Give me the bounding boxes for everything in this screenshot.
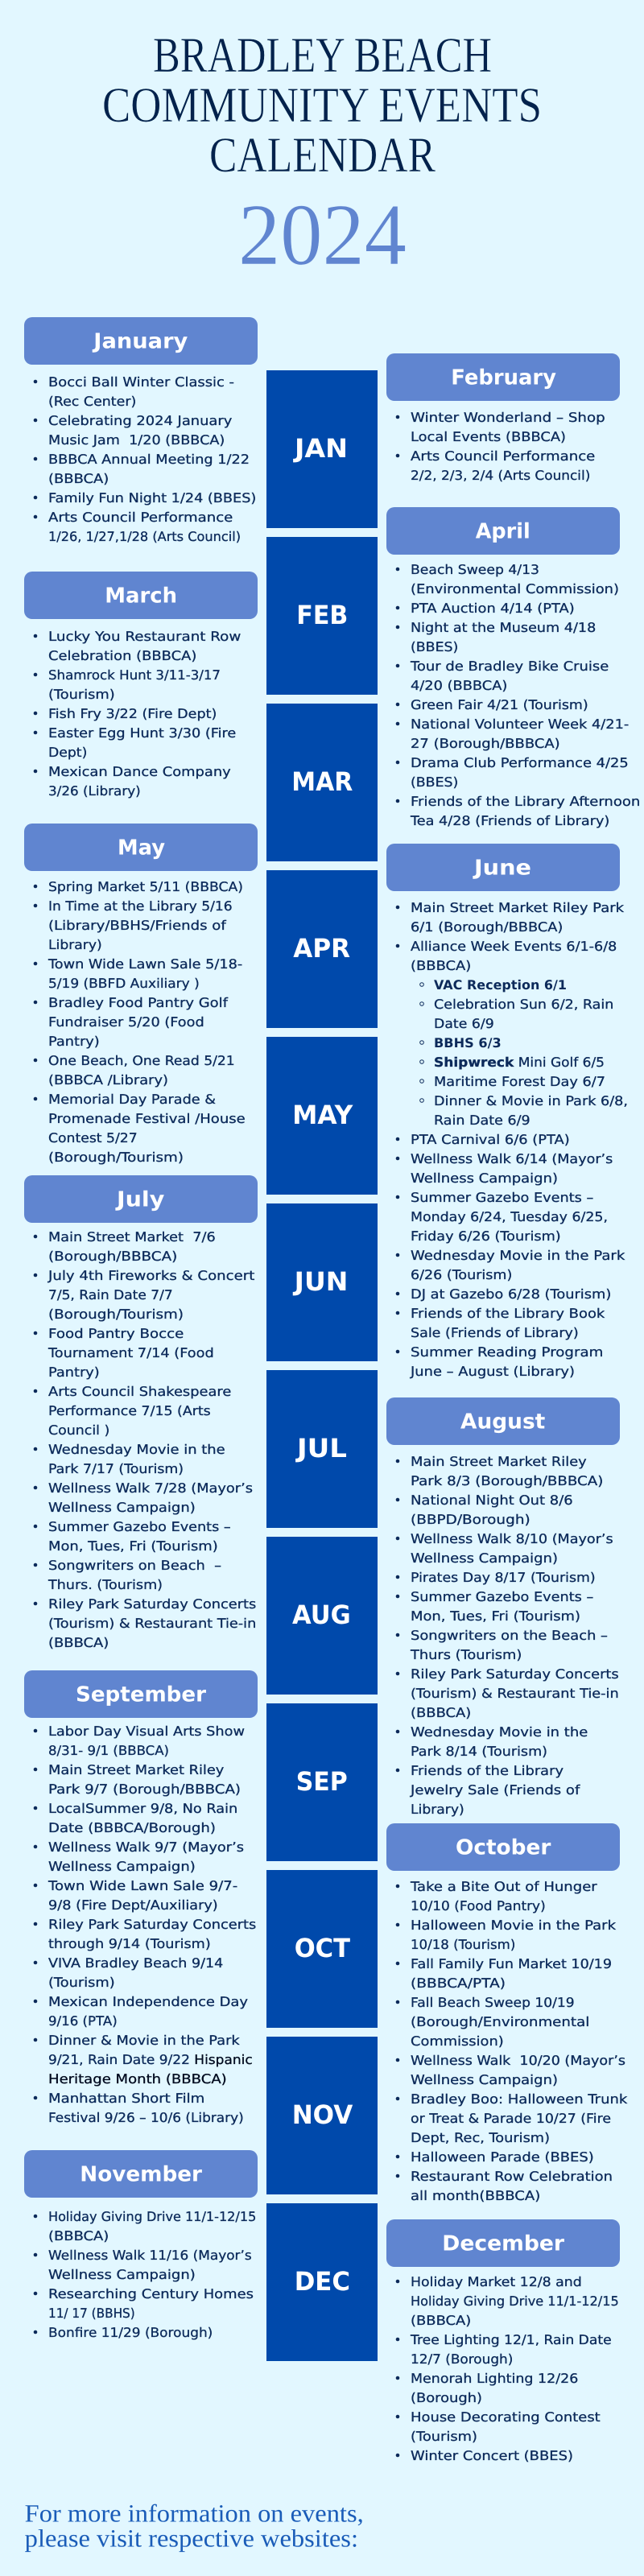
event list: September: 9/8 (Fire Dept/Auxiliary): [48, 1897, 218, 1913]
event list: July: Arts Council Shakespeare: [48, 1384, 231, 1399]
event list: April: Tea 4/28 (Friends of Library): [410, 813, 609, 828]
event list: July: [34, 1229, 256, 1650]
event list: September: 8/31- 9/1 (BBBCA): [48, 1743, 169, 1758]
event list: April: [396, 562, 640, 828]
event list: November: Wellness Campaign): [48, 2267, 196, 2282]
event list: October: (Borough/Environmental: [411, 2014, 589, 2029]
event list: June: Rain Date 6/9: [434, 1113, 530, 1128]
event list: October: Fall Beach Sweep 10/19: [411, 1995, 575, 2010]
event list: July: Pantry): [48, 1364, 100, 1380]
bar: MAR: MAR: [291, 766, 353, 797]
event list: May: Fundraiser 5/20 (Food: [48, 1014, 204, 1030]
event list: June: Alliance Week Events 6/1-6/8: [411, 939, 617, 954]
event list: April: Tour de Bradley Bike Cruise: [410, 658, 609, 674]
event list: July: Wellness Walk 7/28 (Mayor’s: [48, 1480, 253, 1496]
event list: July: July 4th Fireworks & Concert: [47, 1268, 254, 1283]
event list: August: Park 8/14 (Tourism): [411, 1744, 547, 1759]
event list: April: (Environmental Commission): [411, 581, 619, 597]
event list: April: 27 (Borough/BBBCA): [411, 736, 560, 751]
heading: September: [24, 1670, 258, 1718]
event list: September: Festival 9/26 – 10/6 (Library): [48, 2110, 244, 2125]
event list: June: Main Street Market Riley Park: [411, 900, 625, 915]
event list: August: Main Street Market Riley: [411, 1454, 587, 1469]
event list: August: Friends of the Library: [411, 1763, 564, 1778]
heading: December: December: [442, 2231, 564, 2256]
heading: October: October: [456, 1835, 551, 1860]
title: BRADLEY BEACH: [153, 28, 492, 83]
event list: December: Holiday Giving Drive 11/1-12/15: [411, 2293, 619, 2309]
event list: June: Maritime Forest Day 6/7: [434, 1074, 605, 1089]
event list: August: Jewelry Sale (Friends of: [410, 1782, 580, 1798]
event list: July: Wellness Campaign): [48, 1500, 196, 1515]
event list: May: Pantry): [48, 1034, 100, 1049]
bar: AUG: AUG: [292, 1600, 351, 1630]
event list: July: Thurs. (Tourism): [47, 1577, 163, 1592]
event list: February: Arts Council Performance: [411, 448, 595, 464]
event list: April: National Volunteer Week 4/21-: [411, 716, 629, 732]
panel: September: [24, 1670, 258, 2125]
event list: June: Friends of the Library Book: [411, 1306, 605, 1321]
event list: January: 1/26, 1/27,1/28 (Arts Council): [48, 529, 241, 544]
event list: January: Arts Council Performance: [48, 510, 233, 525]
event list: December: [396, 2274, 619, 2463]
bar: JAN: [266, 370, 378, 528]
heading: September: September: [76, 1682, 206, 1707]
event list: June: Monday 6/24, Tuesday 6/25,: [411, 1209, 608, 1224]
event list: December: (BBBCA): [411, 2313, 471, 2328]
panel: January: [24, 317, 258, 544]
event list: July: 7/5, Rain Date 7/7: [48, 1287, 173, 1302]
event list: July: Wednesday Movie in the: [48, 1442, 225, 1457]
heading: November: [24, 2150, 258, 2198]
event list: July: Main Street Market 7/6: [48, 1229, 216, 1245]
event list: May: Town Wide Lawn Sale 5/18-: [47, 956, 242, 972]
event list: February: [396, 410, 605, 483]
year heading: 2024: [238, 186, 407, 283]
bar: APR: APR: [293, 933, 350, 964]
event list: December: Winter Concert (BBES): [411, 2448, 573, 2463]
heading: March: [24, 572, 258, 619]
event list: January: Music Jam 1/20 (BBBCA): [48, 432, 225, 448]
event list: March: Celebration (BBBCA): [48, 648, 196, 663]
panel: November: [24, 2150, 258, 2340]
event list: June: Wellness Walk 6/14 (Mayor’s: [411, 1151, 613, 1166]
bar: JUL: JUL: [295, 1433, 347, 1463]
event list: August: Songwriters on the Beach –: [411, 1628, 608, 1643]
event list: August: [396, 1454, 619, 1817]
event list: June: Summer Reading Program: [411, 1344, 603, 1360]
event list: January: Bocci Ball Winter Classic -: [48, 374, 234, 390]
heading: December: [386, 2219, 620, 2267]
event list: October: Commission): [411, 2033, 504, 2049]
heading: July: July: [115, 1188, 164, 1212]
event list: August: Pirates Day 8/17 (Tourism): [411, 1570, 596, 1585]
event list: June: 6/1 (Borough/BBBCA): [411, 919, 563, 935]
event list: October: 10/18 (Tourism): [411, 1937, 515, 1952]
event list: December: 12/7 (Borough): [411, 2351, 513, 2367]
event list: September: VIVA Bradley Beach 9/14: [48, 1955, 223, 1971]
event list: May: (Library/BBHS/Friends of: [48, 918, 226, 933]
event list: November: 11/ 17 (BBHS): [48, 2306, 135, 2321]
heading: June: [386, 844, 620, 891]
event list: April: (BBES): [411, 774, 458, 790]
event list: April: (BBES): [411, 639, 458, 654]
footer note: [25, 2499, 364, 2552]
bar: AUG: [266, 1537, 378, 1695]
event list: May: [34, 879, 246, 1165]
heading: January: January: [92, 330, 188, 354]
event list: October: Halloween Parade (BBES): [411, 2149, 594, 2165]
event list: April: PTA Auction 4/14 (PTA): [411, 601, 575, 616]
bar: OCT: [266, 1870, 378, 2028]
event list: February: Local Events (BBBCA): [411, 429, 566, 444]
panel: December: [386, 2219, 620, 2463]
event list: September: Riley Park Saturday Concerts: [48, 1917, 256, 1932]
event list: September: Town Wide Lawn Sale 9/7-: [47, 1878, 237, 1893]
event list: March: Fish Fry 3/22 (Fire Dept): [48, 706, 217, 721]
heading: August: August: [460, 1410, 545, 1435]
event list: May: One Beach, One Read 5/21: [48, 1053, 235, 1068]
event list: July: Riley Park Saturday Concerts: [48, 1596, 256, 1612]
event list: May: Memorial Day Parade &: [48, 1092, 216, 1107]
event list: October: 10/10 (Food Pantry): [411, 1898, 546, 1913]
event list: May: Library): [48, 937, 102, 952]
heading: May: [24, 824, 258, 871]
heading: October: [386, 1823, 620, 1871]
event list: June: (BBBCA): [411, 958, 471, 973]
event list: August: (BBPD/Borough): [411, 1512, 530, 1527]
event list: August: (Tourism) & Restaurant Tie-in: [411, 1686, 619, 1701]
bar: APR: [266, 870, 378, 1028]
event list: March: Dept): [48, 745, 87, 760]
event list: October: or Treat & Parade 10/27 (Fire: [411, 2111, 611, 2126]
event list: March: Easter Egg Hunt 3/30 (Fire: [48, 725, 236, 741]
event list: June: Summer Gazebo Events –: [411, 1190, 593, 1205]
event list: October: Restaurant Row Celebration: [411, 2169, 613, 2184]
event list: March: [34, 629, 241, 799]
heading: May: May: [118, 836, 165, 860]
event list: December: Menorah Lighting 12/26: [411, 2371, 578, 2386]
event list: September: Date (BBBCA/Borough): [48, 1820, 216, 1835]
bar: JAN: JAN: [293, 433, 348, 464]
event list: April: 4/20 (BBBCA): [411, 678, 507, 693]
panel: October: [386, 1823, 628, 2203]
bar: DEC: [266, 2203, 378, 2361]
event list: September: Mexican Independence Day: [48, 1994, 248, 2009]
event list: September: Wellness Walk 9/7 (Mayor’s: [48, 1839, 244, 1855]
event list: July: Songwriters on Beach –: [48, 1558, 221, 1573]
event list: September: Labor Day Visual Arts Show: [48, 1724, 245, 1739]
bar: FEB: [266, 537, 378, 695]
event list: September: Main Street Market Riley: [48, 1762, 224, 1777]
event list: August: National Night Out 8/6: [411, 1492, 573, 1508]
event list: August: Wellness Campaign): [411, 1550, 558, 1566]
event list: July: (Borough/Tourism): [48, 1307, 184, 1322]
event list: July: Mon, Tues, Fri (Tourism): [48, 1538, 218, 1554]
panel: June: [386, 844, 628, 1379]
event list: August: Park 8/3 (Borough/BBBCA): [411, 1473, 603, 1488]
event list: July: Tournament 7/14 (Food: [47, 1345, 214, 1360]
event list: January: Celebrating 2024 January: [48, 413, 232, 428]
panel: March: [24, 572, 258, 799]
event list: June: Sale (Friends of Library): [411, 1325, 579, 1340]
bar: MAY: MAY: [292, 1100, 353, 1130]
event list: January: (Rec Center): [48, 394, 136, 409]
event list: July: Summer Gazebo Events –: [48, 1519, 231, 1534]
event list: August: Riley Park Saturday Concerts: [411, 1666, 619, 1682]
event list: January: (BBBCA): [48, 471, 109, 486]
center column: month bars: [266, 370, 378, 2361]
bar: JUL: [266, 1370, 378, 1528]
bar: SEP: SEP: [296, 1766, 348, 1797]
event list: July: (BBBCA): [48, 1635, 109, 1650]
event list: November: Bonfire 11/29 (Borough): [48, 2325, 213, 2340]
event list: June: PTA Carnival 6/6 (PTA): [411, 1132, 570, 1147]
bar: OCT: OCT: [295, 1933, 350, 1963]
event list: November: Holiday Giving Drive 11/1-12/15: [48, 2209, 256, 2224]
event list: September: 9/21, Rain Date 9/22 Hispanic: [48, 2052, 253, 2067]
event list: July: Council ): [48, 1422, 109, 1438]
footer note: For more information on events,: [25, 2499, 364, 2528]
event list: December: Holiday Market 12/8 and: [411, 2274, 582, 2289]
event list: October: Take a Bite Out of Hunger: [410, 1879, 597, 1894]
heading: March: March: [105, 584, 177, 609]
event list: May: In Time at the Library 5/16: [48, 898, 233, 914]
panel: July: [24, 1175, 258, 1650]
event list: May: 5/19 (BBFD Auxiliary ): [48, 976, 200, 991]
event list: September: [34, 1724, 256, 2125]
event list: March: Mexican Dance Company: [48, 764, 231, 779]
event list: June: Shipwreck Mini Golf 6/5: [434, 1055, 605, 1070]
event list: September: 9/16 (PTA): [48, 2013, 118, 2029]
event list: September: Park 9/7 (Borough/BBBCA): [48, 1781, 241, 1797]
event list: May: Bradley Food Pantry Golf: [48, 995, 228, 1010]
event list: June: Wednesday Movie in the Park: [411, 1248, 625, 1263]
event list: January: Family Fun Night 1/24 (BBES): [48, 490, 256, 506]
event list: April: Drama Club Performance 4/25: [411, 755, 629, 770]
event list: November: [34, 2209, 256, 2340]
heading: January: [24, 317, 258, 365]
title: [102, 28, 542, 183]
bar: JUN: JUN: [293, 1266, 348, 1297]
event list: June: Dinner & Movie in Park 6/8,: [434, 1093, 628, 1108]
event list: February: 2/2, 2/3, 2/4 (Arts Council): [411, 468, 590, 483]
event list: November: Wellness Walk 11/16 (Mayor’s: [48, 2248, 252, 2263]
event list: October: Halloween Movie in the Park: [411, 1918, 617, 1933]
heading: August: [386, 1397, 620, 1445]
event list: January: [34, 374, 256, 544]
event list: May: Contest 5/27: [48, 1130, 138, 1146]
event list: October: Bradley Boo: Halloween Trunk: [411, 2091, 628, 2107]
panel: August: [386, 1397, 620, 1817]
event list: July: Performance 7/15 (Arts: [48, 1403, 211, 1418]
event list: August: (BBBCA): [411, 1705, 471, 1720]
event list: December: House Decorating Contest: [411, 2409, 601, 2425]
event list: October: (BBBCA/PTA): [411, 1975, 506, 1991]
event list: September: Heritage Month (BBBCA): [48, 2071, 227, 2087]
event list: August: Summer Gazebo Events –: [411, 1589, 593, 1604]
event list: December: Tree Lighting 12/1, Rain Date: [410, 2332, 612, 2347]
event list: August: Thurs (Tourism): [410, 1647, 522, 1662]
bar: FEB: FEB: [296, 600, 348, 630]
event list: June: Celebration Sun 6/2, Rain: [434, 997, 613, 1012]
event list: October: Fall Family Fun Market 10/19: [411, 1956, 612, 1971]
event list: April: Beach Sweep 4/13: [411, 562, 539, 577]
event list: April: Green Fair 4/21 (Tourism): [411, 697, 588, 712]
event list: August: Wednesday Movie in the: [411, 1724, 588, 1740]
event list: September: through 9/14 (Tourism): [48, 1936, 211, 1951]
event list: May: Promenade Festival /House: [48, 1111, 246, 1126]
event list: February: Winter Wonderland – Shop: [411, 410, 605, 425]
heading: April: April: [476, 520, 530, 544]
heading: June: June: [473, 857, 531, 881]
bar: NOV: NOV: [292, 2099, 353, 2130]
event list: October: all month(BBBCA): [411, 2188, 540, 2203]
event list: March: Lucky You Restaurant Row: [48, 629, 241, 644]
event list: July: Food Pantry Bocce: [48, 1326, 184, 1341]
event list: April: Friends of the Library Afternoon: [411, 794, 640, 809]
heading: July: [24, 1175, 258, 1223]
event list: October: Wellness Walk 10/20 (Mayor’s: [411, 2053, 625, 2068]
bar: NOV: [266, 2037, 378, 2194]
event list: June: DJ at Gazebo 6/28 (Tourism): [411, 1286, 611, 1302]
event list: September: LocalSummer 9/8, No Rain: [48, 1801, 237, 1816]
event list: June: [396, 900, 628, 1379]
event list: August: Wellness Walk 8/10 (Mayor’s: [411, 1531, 613, 1546]
event list: August: Mon, Tues, Fri (Tourism): [411, 1608, 580, 1624]
event list: May: (Borough/Tourism): [48, 1150, 184, 1165]
event list: March: Shamrock Hunt 3/11-3/17: [48, 667, 221, 683]
event list: August: Library): [411, 1802, 464, 1817]
event list: September: Dinner & Movie in the Park: [48, 2033, 241, 2048]
event list: May: Spring Market 5/11 (BBBCA): [48, 879, 243, 894]
event list: January: BBBCA Annual Meeting 1/22: [48, 452, 250, 467]
event list: July: (Tourism) & Restaurant Tie-in: [48, 1616, 256, 1631]
event list: September: (Tourism): [48, 1975, 115, 1990]
event list: October: [396, 1879, 628, 2203]
event list: September: Wellness Campaign): [48, 1859, 196, 1874]
bar: MAR: [266, 704, 378, 861]
event list: June: VAC Reception 6/1: [434, 977, 567, 993]
event list: March: 3/26 (Library): [48, 783, 141, 799]
footer note: please visit respective websites:: [25, 2524, 358, 2552]
event list: December: (Tourism): [411, 2429, 477, 2444]
heading: February: February: [451, 365, 556, 390]
event list: April: Night at the Museum 4/18: [411, 620, 596, 635]
title: COMMUNITY EVENTS: [102, 78, 542, 133]
event list: December: (Borough): [411, 2390, 482, 2405]
event list: November: Researching Century Homes: [48, 2286, 254, 2301]
bar: MAY: [266, 1037, 378, 1195]
event list: July: (Borough/BBBCA): [48, 1249, 177, 1264]
panel: May: [24, 824, 258, 1165]
heading: February: [386, 353, 620, 401]
panel: February: [386, 353, 620, 483]
event list: June: Wellness Campaign): [411, 1170, 558, 1186]
event list: March: (Tourism): [48, 687, 115, 702]
event list: June: Friday 6/26 (Tourism): [411, 1228, 561, 1244]
event list: September: Manhattan Short Film: [48, 2091, 204, 2106]
event list: October: Wellness Campaign): [411, 2072, 558, 2087]
event list: November: (BBBCA): [48, 2228, 109, 2244]
title: CALENDAR: [209, 128, 436, 183]
panel: April: [386, 507, 640, 828]
heading: April: [386, 507, 620, 555]
event list: May: (BBBCA /Library): [48, 1072, 168, 1088]
event list: June: June – August (Library): [410, 1364, 575, 1379]
bar: DEC: DEC: [295, 2266, 350, 2297]
bar: SEP: [266, 1703, 378, 1861]
event list: October: Dept, Rec, Tourism): [411, 2130, 550, 2145]
event list: June: Date 6/9: [434, 1016, 494, 1031]
event list: June: 6/26 (Tourism): [411, 1267, 512, 1282]
event list: June: BBHS 6/3: [434, 1035, 502, 1051]
event list: July: Park 7/17 (Tourism): [48, 1461, 184, 1476]
heading: November: November: [80, 2162, 202, 2186]
bar: JUN: [266, 1203, 378, 1361]
